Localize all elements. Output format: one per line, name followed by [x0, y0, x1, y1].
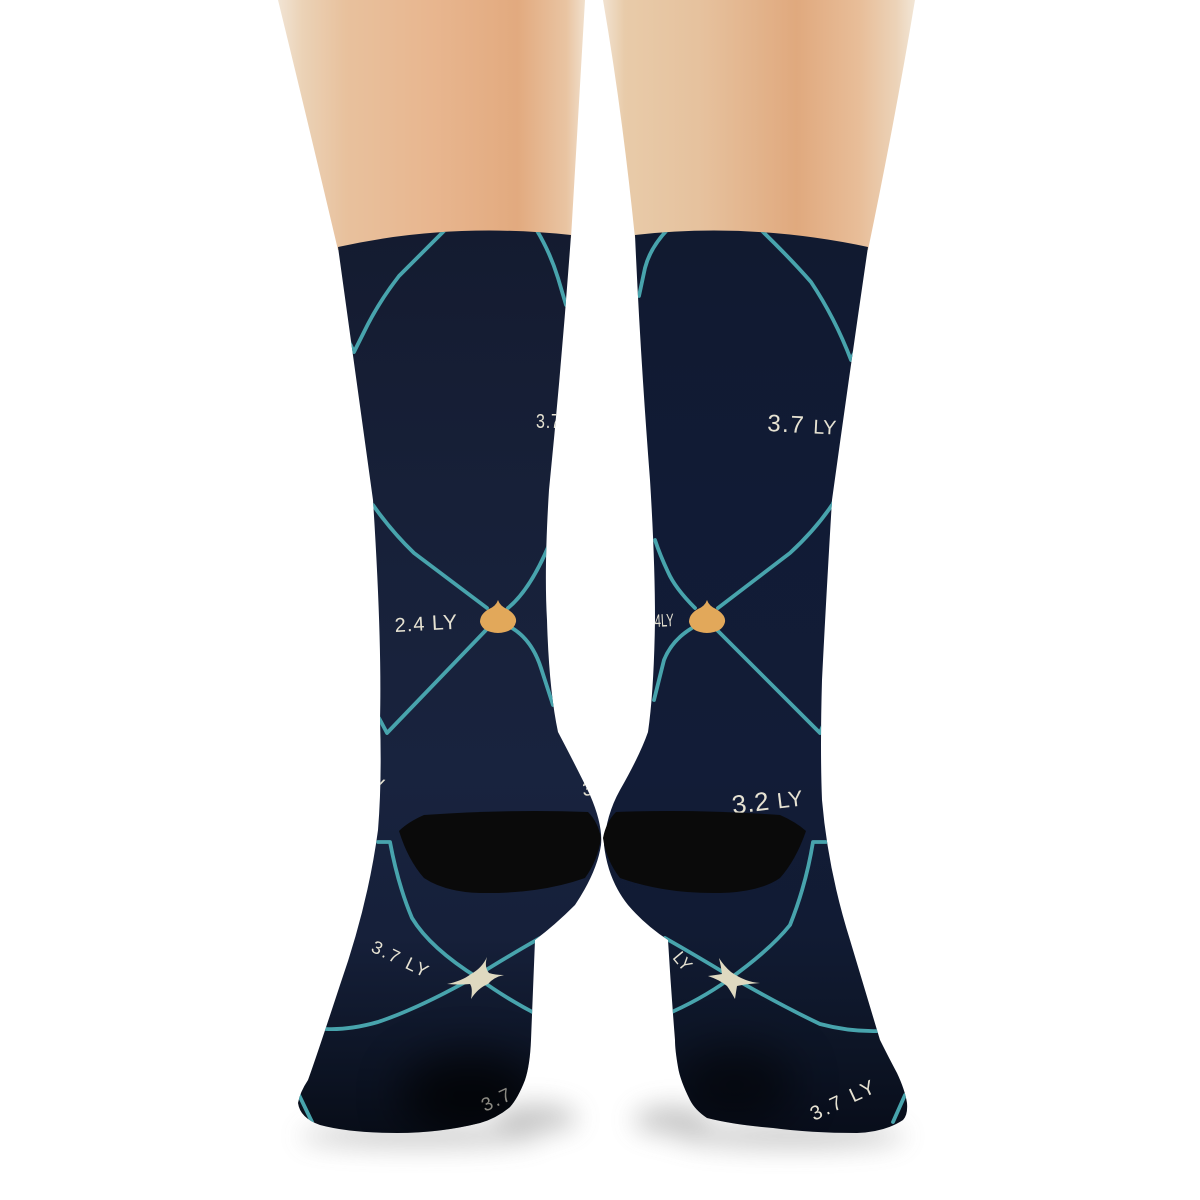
- distance label: 3.7 LY on heel: 3.7 LY: [368, 937, 433, 982]
- heel patch: [603, 811, 806, 893]
- constellation lines: ankle cross: [654, 503, 835, 733]
- distance label: LY (clipped): LY: [361, 773, 387, 798]
- constellation lines: upper section: [346, 229, 566, 352]
- icon: golden bun: [689, 600, 725, 633]
- distance label: 3.2 LY: 3.2 LY: [730, 781, 805, 820]
- right sock pattern: [639, 229, 905, 1126]
- distance label: 3.7 LY near toe: 3.7 LY: [807, 1075, 881, 1126]
- distance label: clipped edge glyph: 3: [581, 779, 594, 801]
- icon: four-point star: [447, 957, 504, 999]
- distance label: 3.7 (clipped): 3.7 LY: [536, 410, 586, 432]
- constellation lines: heel and foot: [665, 842, 905, 1122]
- right sock: [603, 229, 907, 1133]
- constellation lines: heel and foot: [299, 842, 540, 1122]
- distance label: 2.4 LY: 2.4 LY: [394, 611, 459, 637]
- constellation lines: upper section: [639, 229, 860, 360]
- right sock body: [604, 231, 907, 1133]
- shadow under socks: [300, 1104, 905, 1147]
- heel patch: [399, 811, 601, 893]
- left sock pattern: [299, 229, 594, 1137]
- foot shading: [675, 1045, 795, 1125]
- icon: four-point star: [708, 958, 760, 999]
- distance label: 4 LY (clipped): 4LY: [654, 610, 674, 632]
- distance label: 3.7 LY: 3.7 LY: [767, 410, 837, 441]
- foot shading: [400, 1053, 540, 1137]
- constellation lines: ankle cross: [373, 505, 553, 733]
- icon: golden bun: [480, 600, 516, 633]
- right leg: [603, 0, 915, 250]
- left sock body: [298, 231, 601, 1133]
- left leg: [278, 0, 585, 250]
- distance label: 3.7 near toe: 3.7: [478, 1084, 516, 1117]
- left sock: [298, 229, 601, 1137]
- distance label: LY (clipped): LY: [669, 948, 696, 975]
